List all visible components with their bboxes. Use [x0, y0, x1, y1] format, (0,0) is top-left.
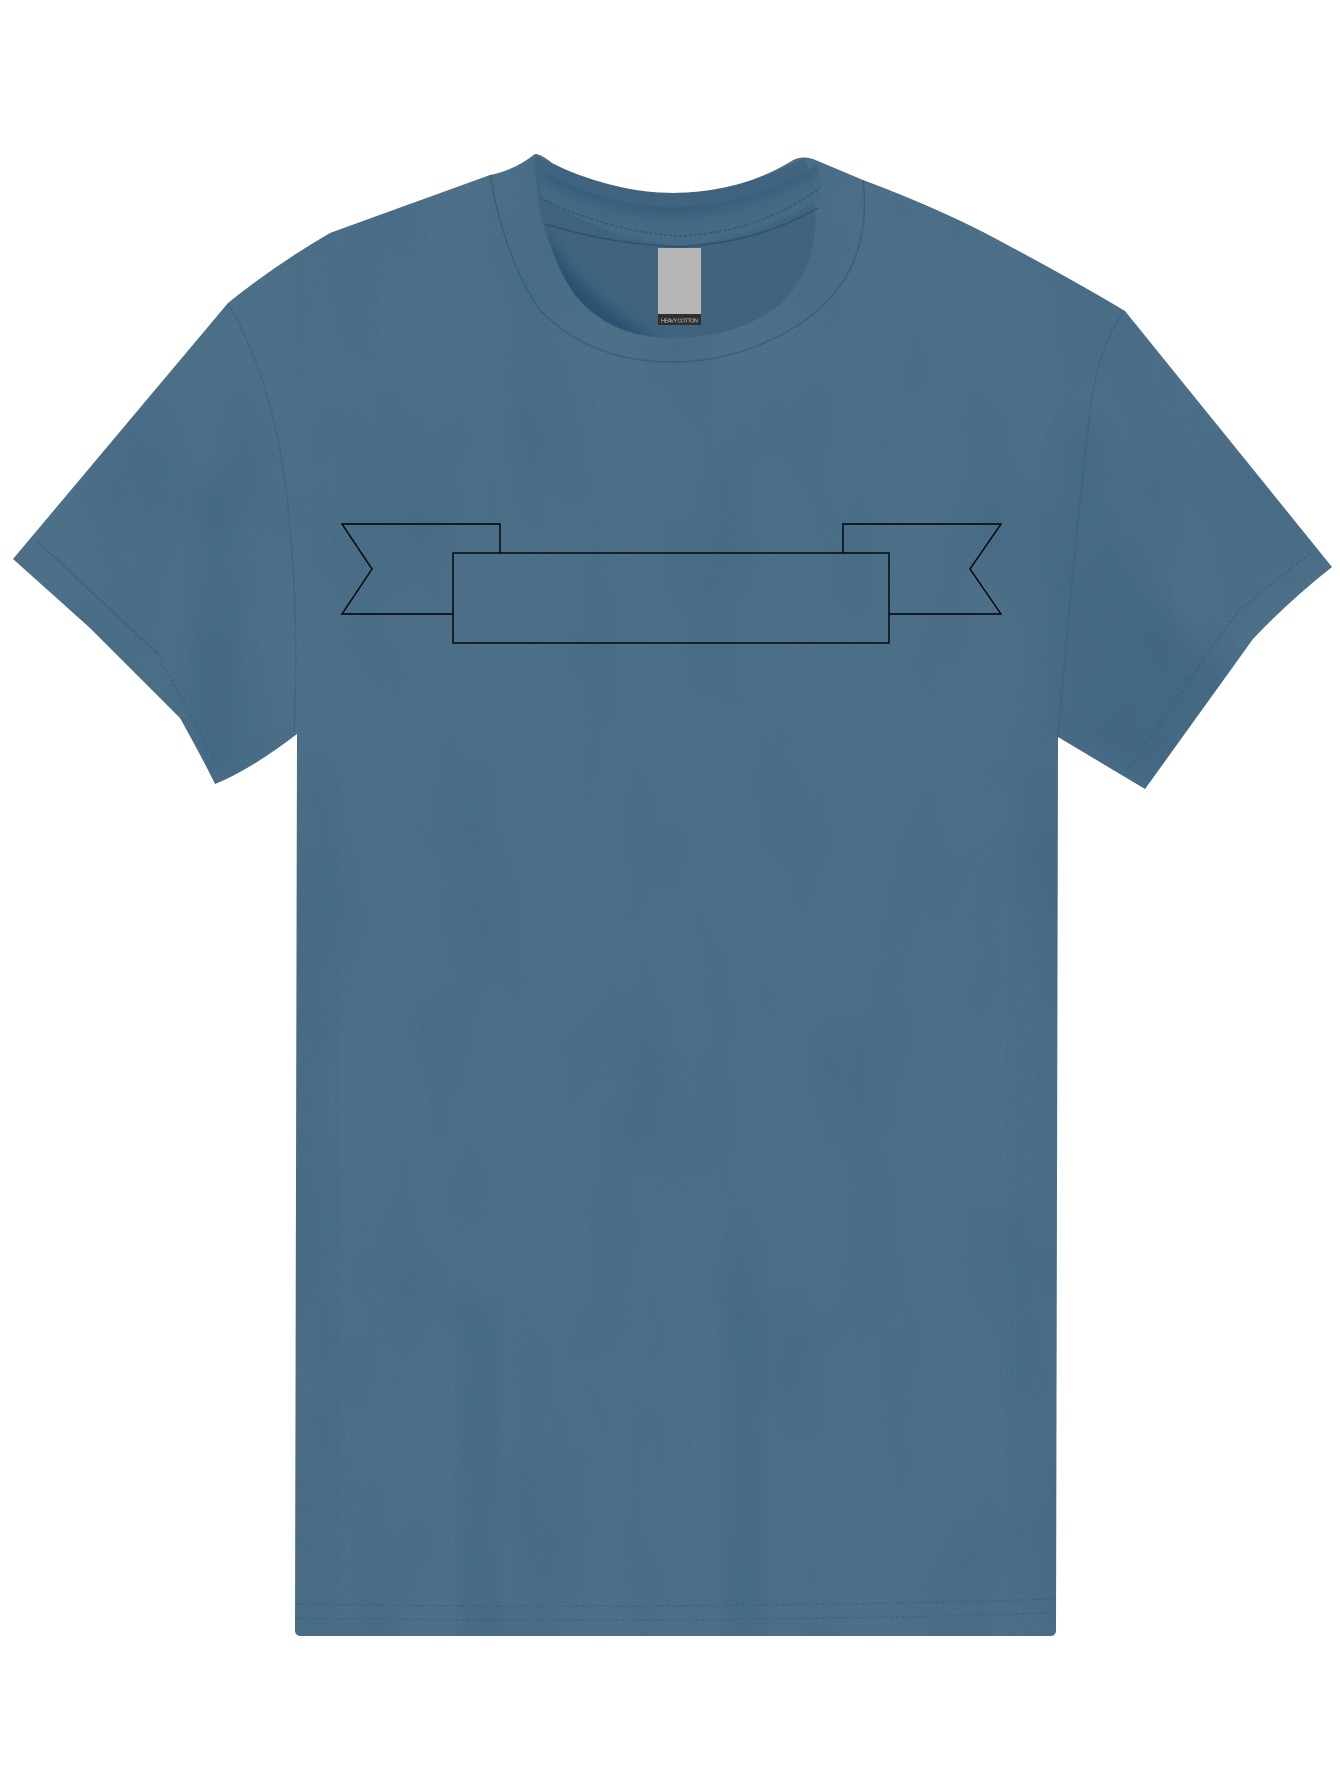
collar and inner neck: [490, 156, 864, 362]
sleeve seams and stitching: [37, 303, 1310, 1620]
fabric folds: [1074, 567, 1226, 780]
back neck band: [814, 187, 820, 199]
inner neck opening: [535, 156, 816, 338]
right ribbon tail: [843, 524, 1001, 614]
tag text: HEAVY COTTON: [661, 318, 698, 324]
left ribbon tail: [342, 524, 500, 614]
ribbon banner outline: [342, 524, 1001, 643]
ribbon centre panel: [453, 553, 889, 643]
neck label tag: [658, 248, 701, 325]
neck shadow: [548, 237, 650, 336]
